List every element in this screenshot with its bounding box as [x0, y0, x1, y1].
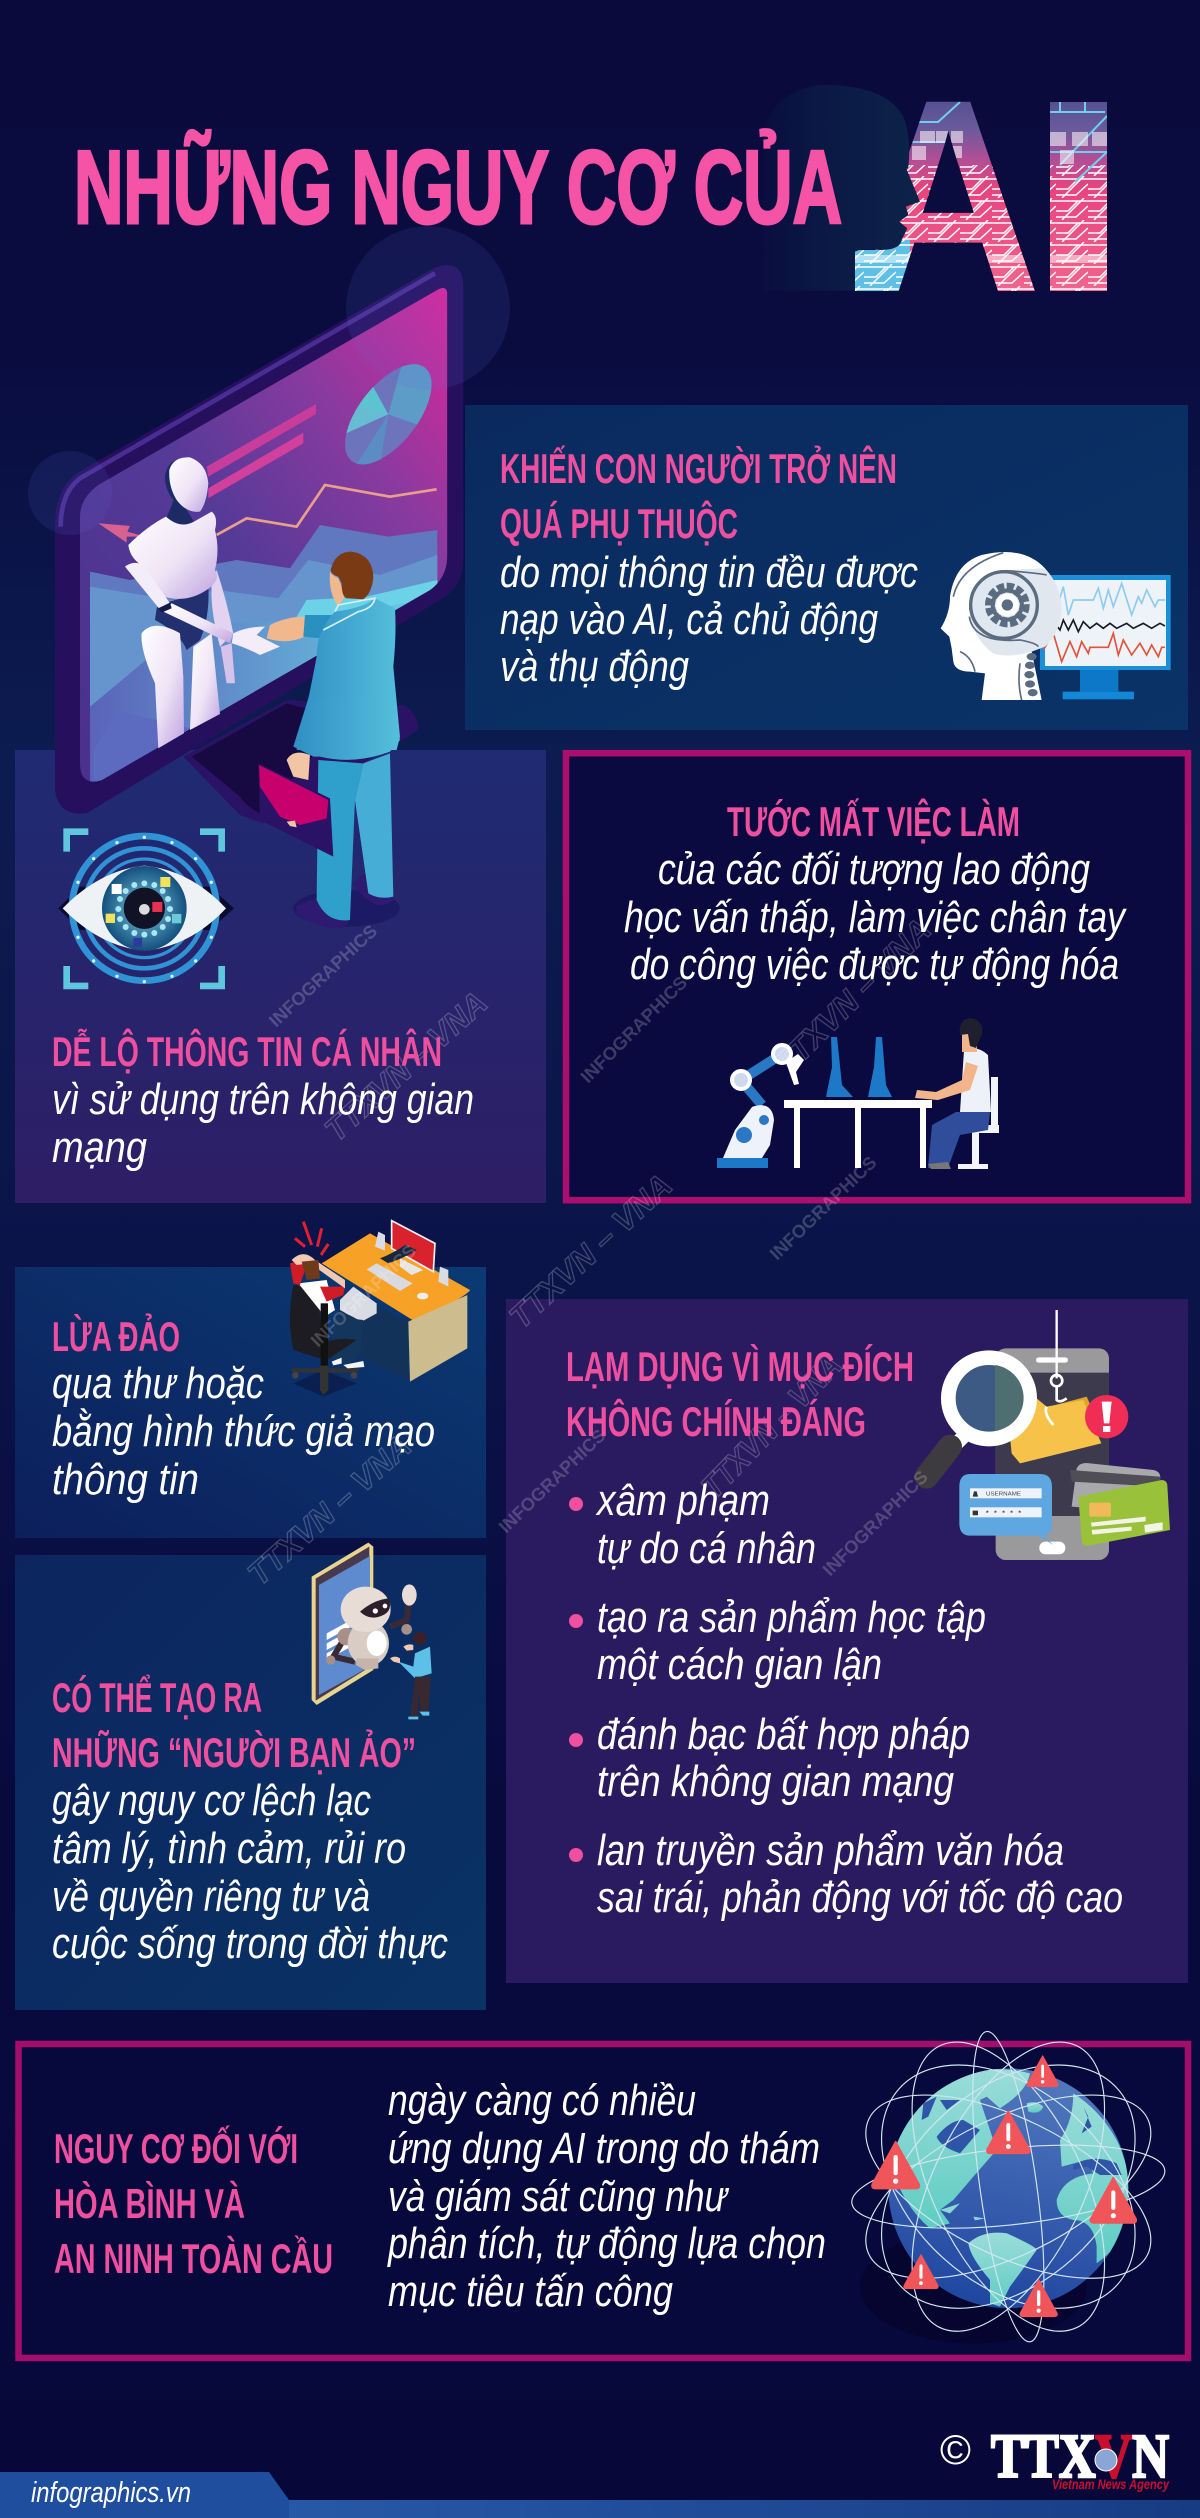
trend line — [217, 485, 437, 535]
illustration: phishing smartphone — [927, 1310, 1170, 1560]
text block: virtual friend: NHỮNG “NGƯỜI BẠN ẢO” — [52, 1728, 416, 1776]
list: abuse bullets: tự do cá nhân — [597, 1524, 816, 1573]
text block: dependence: nạp vào AI, cả chủ động — [500, 595, 878, 644]
text block: privacy — [52, 1027, 474, 1172]
head silhouette — [763, 85, 920, 291]
watermarks: TTXVN – VNA — [241, 1428, 418, 1592]
text block: global security body: phân tích, tự động lựa chọn — [386, 2219, 826, 2268]
illustration: robot emerging from tablet — [312, 1543, 432, 1719]
text block: privacy: vì sử dụng trên không gian — [52, 1075, 474, 1124]
coat tail — [293, 698, 400, 760]
text block: global security body — [386, 2076, 826, 2316]
watermarks: INFOGRAPHICS — [577, 972, 691, 1087]
text block: fraud: LỪA ĐẢO — [52, 1312, 180, 1360]
watermarks — [241, 912, 938, 1592]
glow circles over monitor — [28, 226, 510, 535]
text block: global security body: mục tiêu tấn công — [388, 2267, 673, 2316]
list: abuse bullets: tạo ra sản phẩm học tập — [597, 1593, 986, 1642]
businessman upper body — [267, 552, 400, 750]
watermarks: TTXVN – VNA — [502, 1167, 679, 1335]
watermarks: INFOGRAPHICS — [766, 1152, 880, 1264]
panel: fraud background — [15, 1267, 486, 1538]
icon: AI head and monitor — [941, 552, 1171, 700]
text block: global security heading: NGUY CƠ ĐỐI VỚI — [54, 2124, 298, 2172]
monitors — [826, 1037, 892, 1097]
text block: global security body: và giám sát cũng như — [388, 2172, 729, 2221]
text block: virtual friend: CÓ THỂ TẠO RA — [52, 1673, 262, 1721]
text block: abuse heading — [566, 1343, 914, 1445]
logo: TTXVN: TTXVN — [991, 2423, 1169, 2491]
text block: virtual friend: về quyền riêng tư và — [52, 1872, 370, 1921]
panel: privacy background — [15, 750, 546, 1203]
text block: fraud — [52, 1312, 435, 1504]
text block: job loss — [624, 797, 1127, 989]
text block: abuse heading: KHÔNG CHÍNH ĐÁNG — [566, 1397, 866, 1445]
list: abuse bullets — [569, 1476, 1123, 1922]
pink bars — [207, 404, 316, 477]
text block: dependence: KHIẾN CON NGƯỜI TRỞ NÊN — [500, 444, 897, 492]
briefcase — [287, 753, 310, 780]
robot arm — [741, 1054, 782, 1105]
footer tab with site name — [0, 2472, 289, 2518]
illustration: phishing smartphone: USERNAME — [986, 1491, 1021, 1497]
text block: job loss: của các đối tượng lao động — [658, 845, 1090, 894]
text block: privacy: DỄ LỘ THÔNG TIN CÁ NHÂN — [52, 1027, 442, 1075]
watermarks: TTXVN – VNA — [694, 1347, 849, 1505]
text block: virtual friend — [52, 1673, 448, 1968]
watermarks: TTXVN – VNA — [767, 912, 938, 1082]
footer band — [0, 2500, 1200, 2518]
text block: virtual friend: cuộc sống trong đời thực — [52, 1919, 448, 1968]
legs — [317, 760, 363, 920]
worker — [928, 1112, 990, 1168]
watermarks: INFOGRAPHICS — [819, 1467, 932, 1580]
desk — [784, 1100, 932, 1168]
panel: dependence background — [465, 405, 1188, 730]
footer tab with site name: infographics.vn — [31, 2477, 191, 2509]
text block: dependence: QUÁ PHỤ THUỘC — [500, 499, 738, 547]
panel: job loss frame — [566, 753, 1188, 1200]
text block: dependence: và thụ động — [500, 642, 689, 691]
text block: global security body: ngày càng có nhiều — [388, 2076, 696, 2125]
panel: virtual friend background — [15, 1555, 486, 2010]
text block: abuse heading: LẠM DỤNG VÌ MỤC ĐÍCH — [566, 1343, 914, 1390]
title word AI with circuit texture — [850, 100, 1112, 295]
watermarks: INFOGRAPHICS — [307, 1241, 420, 1351]
text block: global security body: ứng dụng AI trong do thám — [388, 2124, 820, 2173]
watermarks: INFOGRAPHICS — [265, 921, 381, 1031]
text block: fraud: bằng hình thức giả mạo — [52, 1407, 435, 1456]
logo: TTXVN: © — [940, 2426, 971, 2473]
text block: virtual friend: tâm lý, tình cảm, rủi ro — [52, 1824, 406, 1873]
panel: global security frame — [18, 2044, 1188, 2358]
illustration: globe with warnings — [851, 2030, 1166, 2343]
robot — [125, 457, 280, 748]
watermarks: INFOGRAPHICS — [495, 1425, 609, 1537]
illustration: phishing smartphone: * * * * * — [986, 1510, 1021, 1517]
list: abuse bullets: đánh bạc bất hợp pháp — [597, 1710, 970, 1759]
text block: global security heading: HÒA BÌNH VÀ — [54, 2179, 245, 2227]
text block: dependence: do mọi thông tin đều được — [500, 548, 918, 597]
businessman lower body and briefcase — [258, 698, 400, 928]
foot shadows and shoes — [297, 899, 350, 928]
watermarks: TTXVN – VNA — [318, 984, 494, 1148]
text block: global security heading: AN NINH TOÀN CẦU — [54, 2235, 333, 2282]
list: abuse bullets: một cách gian lận — [597, 1640, 882, 1689]
illustration: robot arm and office worker — [717, 1018, 999, 1169]
list: abuse bullets: trên không gian mạng — [597, 1757, 954, 1806]
list: abuse bullets: xâm phạm — [595, 1476, 770, 1525]
text block: dependence — [500, 444, 918, 691]
panel: abuse background — [506, 1299, 1188, 1983]
logo: TTXVN: Vietnam News Agency — [1052, 2476, 1170, 2492]
text block: fraud: qua thư hoặc — [52, 1359, 264, 1408]
monitor screen with chart — [55, 265, 482, 817]
text block: privacy: mạng — [52, 1123, 147, 1172]
text block: global security heading — [54, 2124, 333, 2282]
list: abuse bullets: lan truyền sản phẩm văn hóa — [597, 1826, 1064, 1875]
text block: fraud: thông tin — [52, 1455, 199, 1504]
icon: eye — [58, 832, 234, 986]
text block: job loss: TƯỚC MẤT VIỆC LÀM — [727, 797, 1020, 845]
chair — [953, 1077, 999, 1169]
illustration: hacked office desk — [290, 1221, 470, 1397]
pie chart — [345, 364, 432, 464]
monitor stand — [183, 700, 418, 823]
text block: virtual friend: gây nguy cơ lệch lạc — [52, 1776, 371, 1825]
